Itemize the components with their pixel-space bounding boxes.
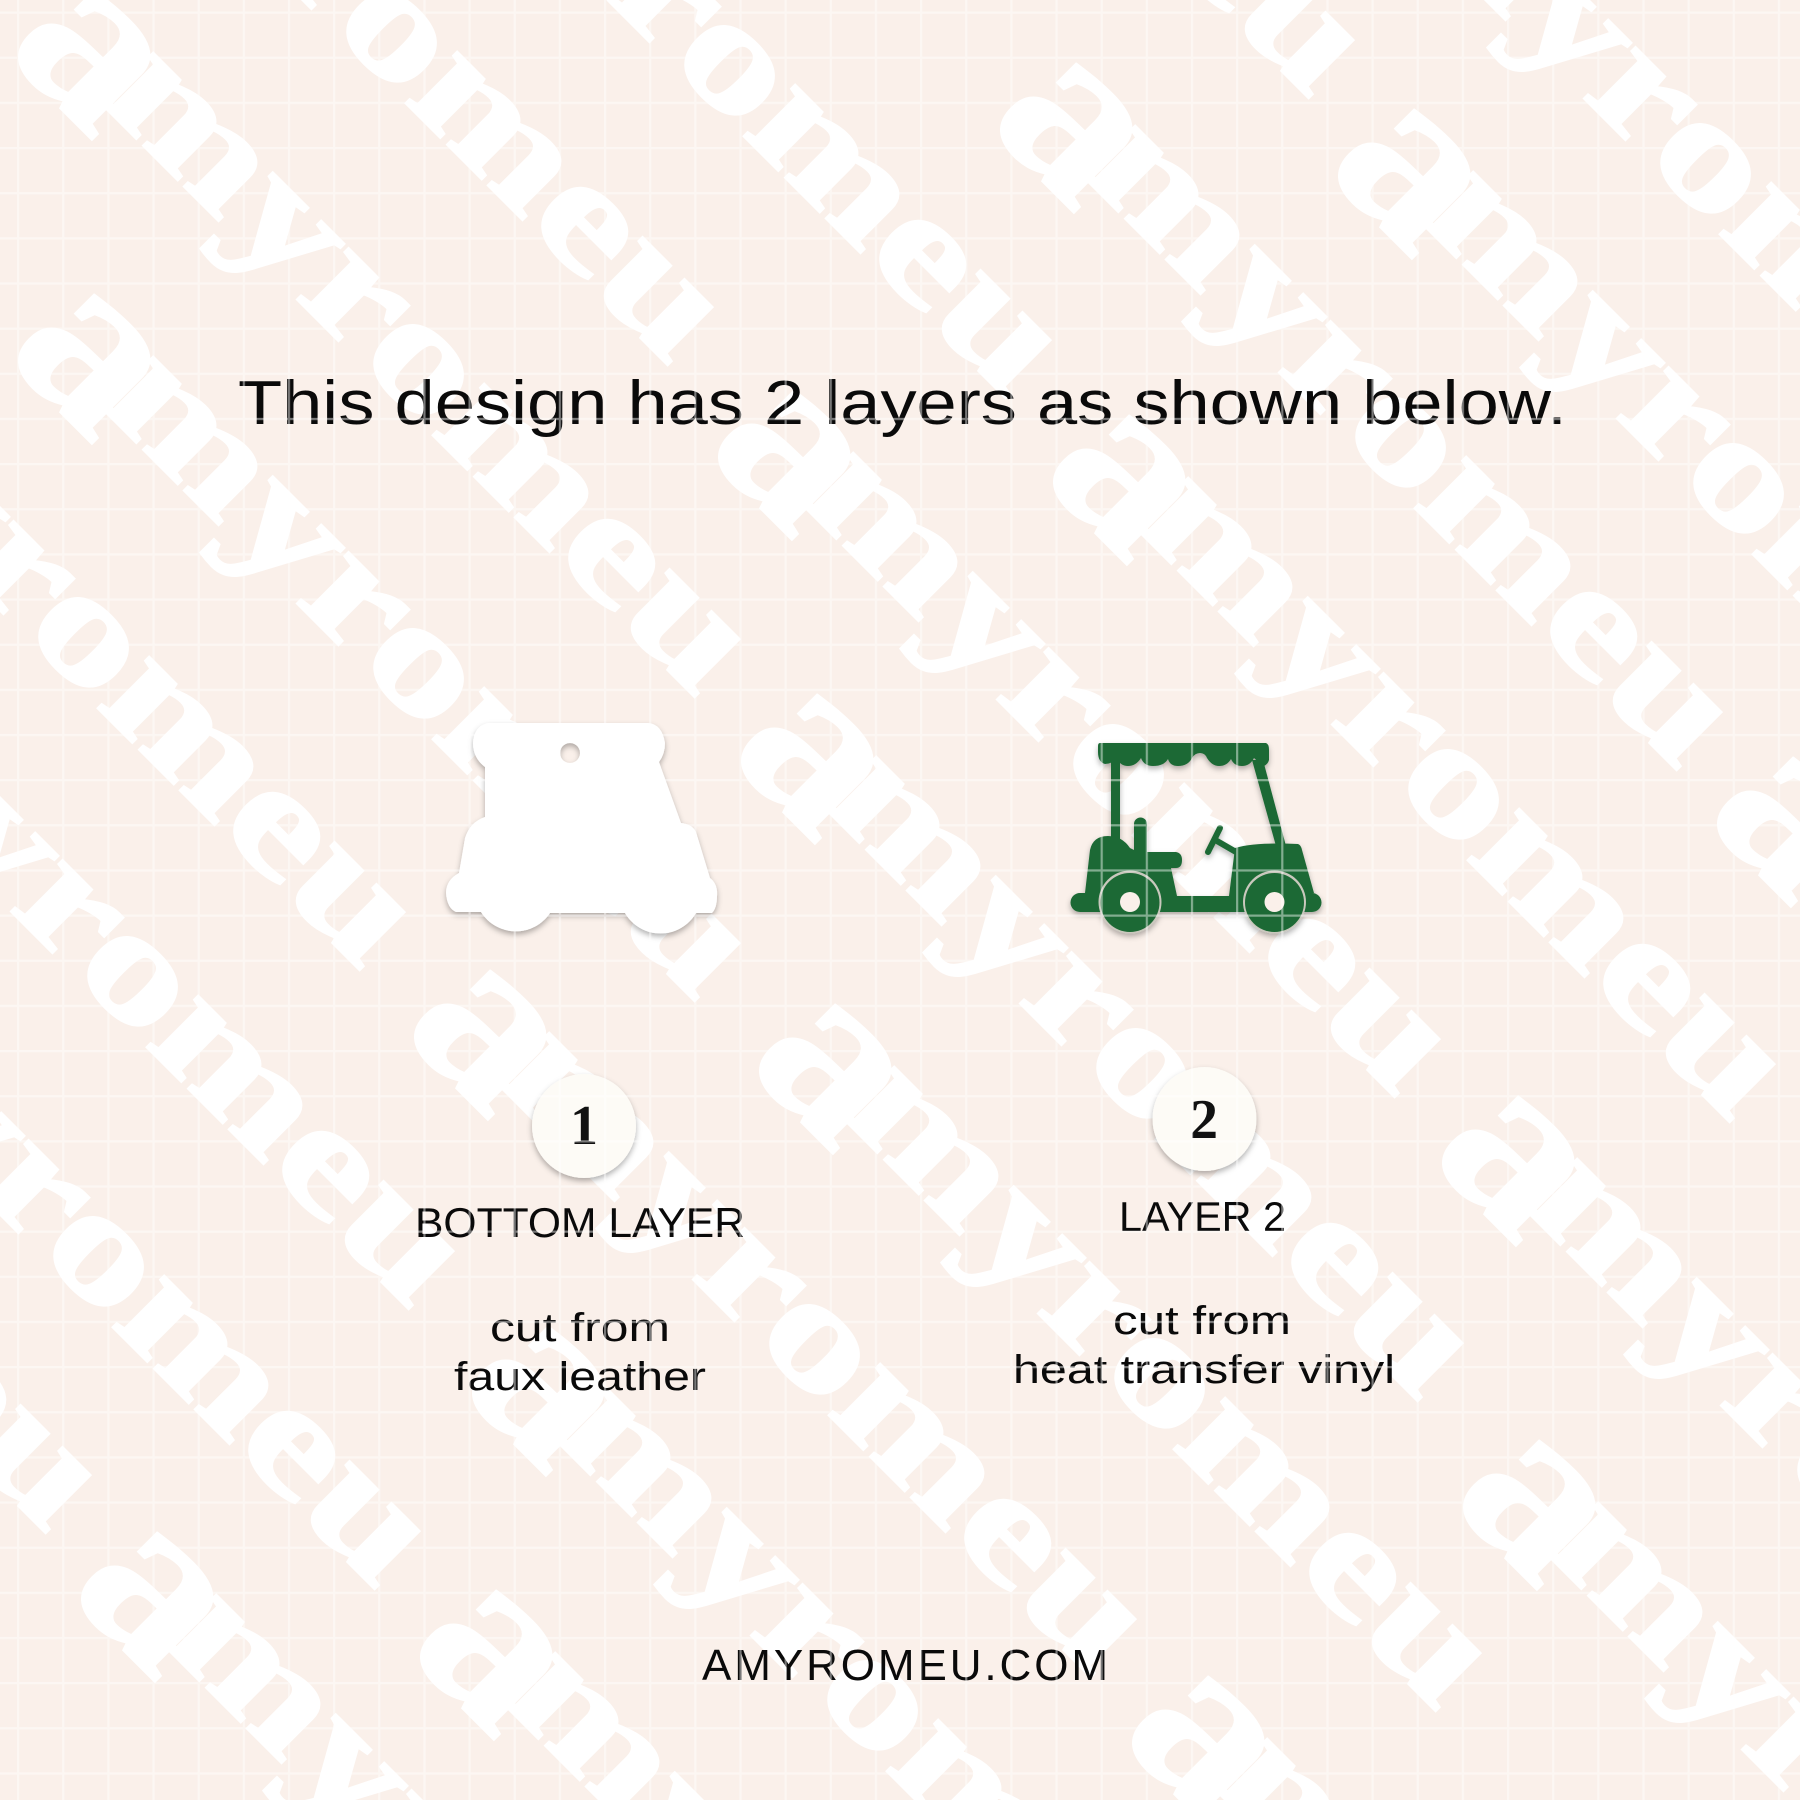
- heading: bottom layer: BOTTOM LAYER: [415, 1199, 745, 1246]
- badge 1: [532, 1074, 636, 1178]
- cart posts: [1111, 755, 1286, 846]
- watermark pattern: a: [1002, 328, 1277, 603]
- text: cut from faux leather: cut from: [490, 1306, 670, 1350]
- text: cut from heat transfer vinyl: heat transfer vinyl: [1013, 1348, 1395, 1392]
- cart steering wheel: [1208, 828, 1236, 852]
- watermark pattern: a: [1412, 1353, 1687, 1628]
- badge 2: 2: [1190, 1089, 1218, 1151]
- watermark pattern: myromeu: [797, 706, 1520, 1428]
- text: cut from heat transfer vinyl: cut from: [1113, 1299, 1291, 1343]
- watermark pattern: a: [363, 883, 638, 1158]
- text: cut from faux leather: [454, 1306, 706, 1399]
- watermark pattern: a: [1287, 22, 1562, 297]
- watermark pattern: myromeu: [815, 1016, 1538, 1738]
- cart body: [1070, 818, 1322, 912]
- cart roof: [1098, 743, 1269, 766]
- layer 1 shape: white faux leather base: [446, 723, 717, 933]
- watermark pattern: myromeu: [74, 2, 797, 724]
- watermark pattern: a: [667, 303, 942, 578]
- watermark pattern: a: [690, 607, 965, 882]
- text: cut from heat transfer vinyl: [1013, 1299, 1395, 1392]
- text: cut from faux leather: faux leather: [454, 1355, 706, 1399]
- watermark pattern: myromeu: [774, 402, 1497, 1124]
- watermark pattern: a: [30, 1445, 305, 1720]
- watermark pattern: myromeu: [74, 306, 797, 1028]
- layer 2 shape: green golf cart: [1070, 743, 1322, 934]
- badge 2: [1152, 1067, 1256, 1171]
- watermark pattern: myromeu: [1056, 75, 1779, 797]
- badge 1: 1: [570, 1095, 598, 1157]
- heading: layer 2: LAYER 2: [1119, 1193, 1286, 1240]
- watermark pattern: a: [369, 1503, 644, 1778]
- watermark pattern: a: [421, 1239, 696, 1514]
- title: This design has 2 layers as shown below.: [238, 369, 1567, 438]
- watermark pattern: a: [1391, 1009, 1666, 1284]
- watermark pattern: a: [708, 917, 983, 1192]
- cart right wheel: [1243, 870, 1306, 934]
- watermark pattern: myromeu: [470, 982, 1193, 1704]
- cart left wheel: [1098, 870, 1162, 934]
- footer url: AMYROMEU.COM: [702, 1641, 1108, 1690]
